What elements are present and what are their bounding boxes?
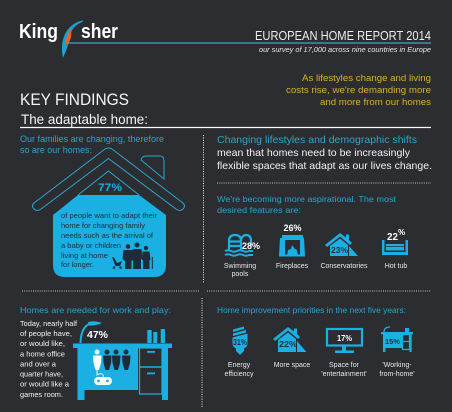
icon: hot tub 22% [382, 228, 408, 270]
icon: fireplace 26% [276, 223, 309, 270]
text block: home office [20, 321, 77, 399]
icon: hot tub 22%: 22 [387, 232, 398, 243]
yellow intro text: and more from our homes [320, 97, 432, 107]
icon: conservatory 23%: Conservatories [320, 263, 368, 270]
text block: home office: quarter have, [20, 372, 63, 378]
icon: house with statistic: needs such as the arrival of [61, 231, 153, 240]
icon: energy bulb 31%: 31% [233, 338, 247, 347]
panel heading: priorities: Home improvement priorities in the next five years: [217, 305, 406, 315]
icon: television 17%: 'entertainment' [321, 371, 367, 378]
icon: house with statistic [32, 148, 184, 277]
icon: small desk 15%: 'Working- [382, 362, 412, 369]
panel heading: families: Our families are changing, therefore [20, 134, 164, 144]
yellow intro text: As lifestyles change and living [302, 73, 431, 83]
icon: fireplace 26%: Fireplaces [276, 263, 309, 270]
report title: EUROPEAN HOME REPORT 2014 [255, 29, 431, 43]
panel: desired features [217, 194, 408, 278]
text block: home office: a home office [20, 352, 65, 358]
icon: energy bulb 31% [224, 326, 254, 378]
text block: home office: Today, nearly half [20, 321, 77, 328]
heading: key findings: KEY FINDINGS [20, 91, 129, 109]
report subtitle: our survey of 17,000 across nine countries in Europe [259, 47, 431, 54]
icon: small desk 15% [379, 327, 415, 378]
icon: small desk 15%: 15% [385, 337, 400, 346]
panel heading: aspirational [217, 194, 397, 215]
panel heading: families [20, 134, 164, 155]
icon: swimming pool 28%: 28% [242, 241, 260, 251]
text block: home office: or would like, [20, 341, 65, 348]
text block: home office: games room. [20, 392, 63, 399]
icon: fireplace 26%: 26% [284, 223, 302, 233]
icon: small desk 15%: from-home' [379, 371, 415, 378]
icon: television 17%: 17% [337, 333, 352, 343]
icon: energy bulb 31%: Energy [228, 362, 251, 369]
logo: Kingfisher [19, 21, 118, 58]
subheading: the adaptable home: The adaptable home: [21, 112, 148, 127]
icon: house 22%: More space [274, 362, 310, 369]
panel: improvement priorities [217, 305, 415, 378]
logo: Kingfisher: King [19, 21, 58, 43]
yellow intro text [286, 73, 432, 107]
panel heading: aspirational: desired features are: [217, 205, 301, 215]
panel: lifestyle statement: mean that homes need to be increasingly [217, 147, 411, 159]
icon: people and controller [93, 350, 130, 385]
panel: families [20, 134, 184, 277]
panel: lifestyle statement: flexible spaces that adapt as our lives change. [217, 160, 432, 172]
icon: desk 47% [73, 321, 172, 400]
icon: house with statistic: living at home [61, 251, 108, 260]
icon: hot tub 22%: Hot tub [385, 263, 407, 270]
panel: lifestyle statement [217, 134, 432, 172]
text block: home office: or would like a [20, 382, 69, 388]
icon: swimming pool 28% [224, 235, 260, 278]
icon: house with statistic: home for changing family [61, 221, 145, 230]
icon: television 17%: Space for [329, 362, 360, 369]
panel heading: work and play: Homes are needed for work and play: [20, 305, 171, 315]
text block: home office: of people have, [20, 331, 72, 338]
panel heading: families: so are our homes: [20, 145, 92, 155]
icon: television 17% [321, 329, 367, 378]
icon: desk 47%: 47% [87, 329, 109, 341]
panel: work and play [20, 305, 172, 400]
icon: conservatory 23%: 23% [331, 246, 348, 255]
icon: conservatory 23% [320, 233, 368, 270]
logo: Kingfisher: sher [81, 21, 118, 43]
icon: house 22% [273, 327, 310, 369]
icon: swimming pool 28%: Swimming [224, 263, 256, 270]
icon: swimming pool 28%: pools [232, 271, 249, 278]
icon: house with statistic: 77% [98, 182, 122, 194]
icon: house with statistic: a baby or children [61, 241, 121, 250]
icon: house with statistic: for longer. [61, 260, 94, 269]
panel heading: aspirational: We're becoming more aspirational. The most [217, 194, 397, 204]
icon: house 22%: 22% [279, 339, 297, 349]
text block: home office: and over a [20, 362, 56, 368]
icon: house with statistic: of people want to adapt their [61, 211, 158, 220]
panel: lifestyle statement: Changing lifestyles and demographic shifts [217, 134, 417, 146]
icon: hot tub 22%: % [398, 228, 405, 237]
icon: family [112, 242, 153, 269]
icon: energy bulb 31%: efficiency [224, 371, 254, 378]
yellow intro text: costs rise, we're demanding more [286, 85, 431, 95]
